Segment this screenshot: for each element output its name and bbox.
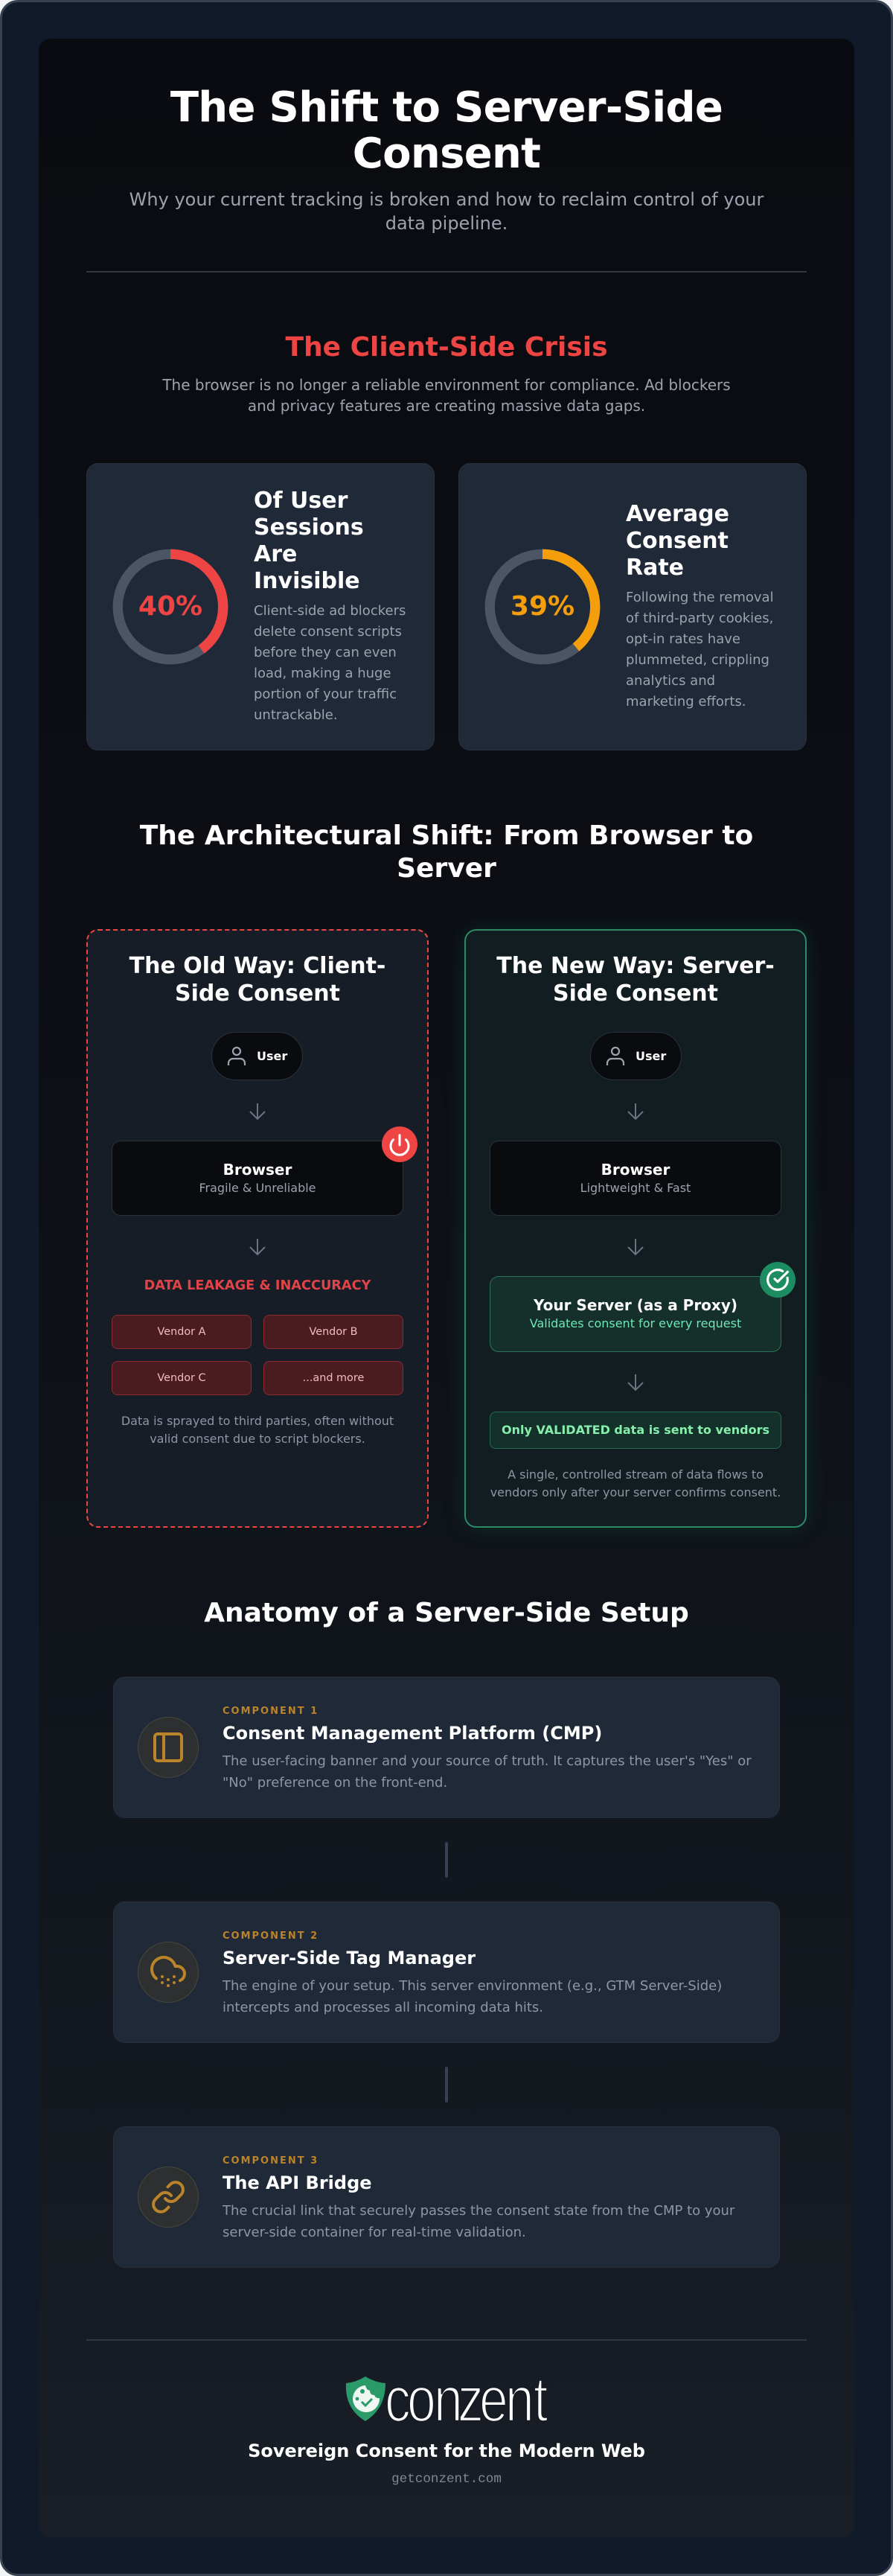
stat description: load, making a huge [254,666,391,681]
validated data box [490,1412,781,1449]
donut chart: 40% [113,549,228,664]
icon: link [138,2167,199,2228]
heading: anatomy: Anatomy of a Server-Side Setup [204,1598,689,1628]
component label: COMPONENT 3 [223,2155,319,2167]
panel: component 2 [113,1901,780,2043]
browser sublabel: Lightweight & Fast [580,1181,691,1195]
icon: cloud [138,1942,199,2003]
arrow down [249,1103,266,1120]
stat heading: Invisible [254,568,360,594]
stat description: opt-in rates have [626,631,740,647]
stat description: analytics and [626,673,715,689]
website url: getconzent.com [391,2472,502,2487]
new way heading: The New Way: Server- [496,953,775,979]
crisis intro text [162,376,731,415]
panel: component 1 [113,1677,780,1818]
component label: COMPONENT 2 [223,1931,319,1942]
donut chart: 39% [485,549,600,664]
badge: power icon [382,1126,417,1162]
stat description: delete consent scripts [254,624,402,640]
stat description: before they can even [254,645,397,660]
new way description [490,1467,781,1499]
icon: user [228,1047,246,1065]
stat description: marketing efforts. [626,694,746,710]
browser label: Browser [601,1161,670,1179]
crisis intro text: The browser is no longer a reliable environment for compliance. Ad blockers [162,376,731,394]
vendor A: Vendor A [158,1326,205,1338]
new way description: vendors only after your server confirms consent. [490,1485,781,1499]
user pill [590,1032,682,1080]
user label: User [636,1049,666,1063]
stat heading: Of User [254,488,348,514]
stat heading: Sessions [254,514,364,541]
user label: User [257,1049,287,1063]
connector [445,2067,448,2102]
component description: The engine of your setup. This server environment (e.g., GTM Server-Side) [223,1978,722,1994]
browser node [490,1141,781,1216]
logo wordmark: conzent [385,2365,548,2435]
stat description: of third-party cookies, [626,610,773,626]
tagline: Sovereign Consent for the Modern Web [248,2440,645,2461]
new way description: A single, controlled stream of data flows to [508,1467,764,1482]
badge: check icon [760,1262,796,1298]
component description [222,1753,752,1791]
heading: architectural shift [140,820,753,884]
stat description: Following the removal [626,590,774,605]
panel: old way [86,929,429,1528]
server node [490,1276,781,1352]
vendor B [263,1315,403,1349]
arrow down [627,1103,644,1120]
arrow down [249,1239,266,1255]
old way description: valid consent due to script blockers. [150,1432,365,1446]
component title: Consent Management Platform (CMP) [223,1723,602,1744]
subtitle: data pipeline. [385,213,508,234]
vendor C: Vendor C [157,1372,206,1384]
heading: architectural shift: The Architectural Shift: From Browser to [140,820,753,851]
old way description [121,1414,394,1446]
logo shield [346,2376,385,2421]
vendor B: Vendor B [309,1326,357,1338]
server sublabel: Validates consent for every request [530,1316,741,1330]
title: Consent [353,130,540,178]
new way heading: Side Consent [553,981,718,1007]
stat heading: Consent [626,528,729,554]
old way heading [129,953,385,1007]
crisis intro text: and privacy features are creating massive data gaps. [248,397,645,415]
subtitle [129,189,764,234]
title [170,83,723,178]
icon: panel [138,1717,199,1778]
component description: The crucial link that securely passes the consent state from the CMP to your [223,2203,734,2219]
arrow down [627,1374,644,1391]
new way heading [496,953,775,1007]
component title: The API Bridge [223,2172,372,2193]
stat description: Client-side ad blockers [254,603,406,619]
server label: Your Server (as a Proxy) [534,1296,737,1314]
subtitle: Why your current tracking is broken and how to reclaim control of your [129,189,764,210]
component title: Server-Side Tag Manager [223,1948,476,1968]
component description: "No" preference on the front-end. [223,1775,447,1791]
arrow down [627,1239,644,1255]
panel: component 3 [113,2126,780,2268]
title: The Shift to Server-Side [170,83,723,132]
browser label: Browser [223,1161,292,1179]
component description: server-side container for real-time validation. [223,2225,526,2240]
and more: ...and more [303,1372,364,1384]
component description [222,1978,722,2015]
browser sublabel: Fragile & Unreliable [199,1181,316,1195]
component description: The user-facing banner and your source of truth. It captures the user's "Yes" or [223,1753,752,1769]
vendor A [112,1315,252,1349]
panel: stat 40 percent [86,463,435,750]
leakage label: DATA LEAKAGE & INACCURACY [144,1278,371,1293]
stat heading: Average [626,501,729,527]
logo: conzent [345,2365,548,2435]
validated data box: Only VALIDATED data is sent to vendors [502,1423,769,1437]
browser node [112,1141,403,1216]
vendor C [112,1361,252,1395]
value: 39%: 39% [510,591,574,622]
connector [445,1842,448,1878]
heading: architectural shift: Server [397,853,496,884]
stat heading [254,488,364,594]
vendor grid [112,1315,403,1395]
component description: intercepts and processes all incoming data hits. [223,2000,543,2015]
stat heading: Are [254,541,297,567]
panel: stat 39 percent [458,463,807,750]
old way heading: The Old Way: Client- [129,953,385,979]
icon: user [606,1047,625,1065]
old way description: Data is sprayed to third parties, often without [121,1414,394,1428]
and more [263,1361,403,1395]
value: 40%: 40% [138,591,202,622]
stat description [254,603,406,723]
panel: new way [464,929,807,1528]
stat description [626,590,774,710]
heading: client-side crisis: The Client-Side Crisis [285,332,608,363]
stat description: plummeted, crippling [626,652,769,668]
user pill [211,1032,303,1080]
stat heading: Rate [626,555,684,581]
stat description: portion of your traffic [254,686,397,702]
old way heading: Side Consent [175,981,340,1007]
component description [222,2203,735,2240]
stat description: untrackable. [254,707,338,723]
component label: COMPONENT 1 [223,1706,319,1717]
stat heading [626,501,729,581]
